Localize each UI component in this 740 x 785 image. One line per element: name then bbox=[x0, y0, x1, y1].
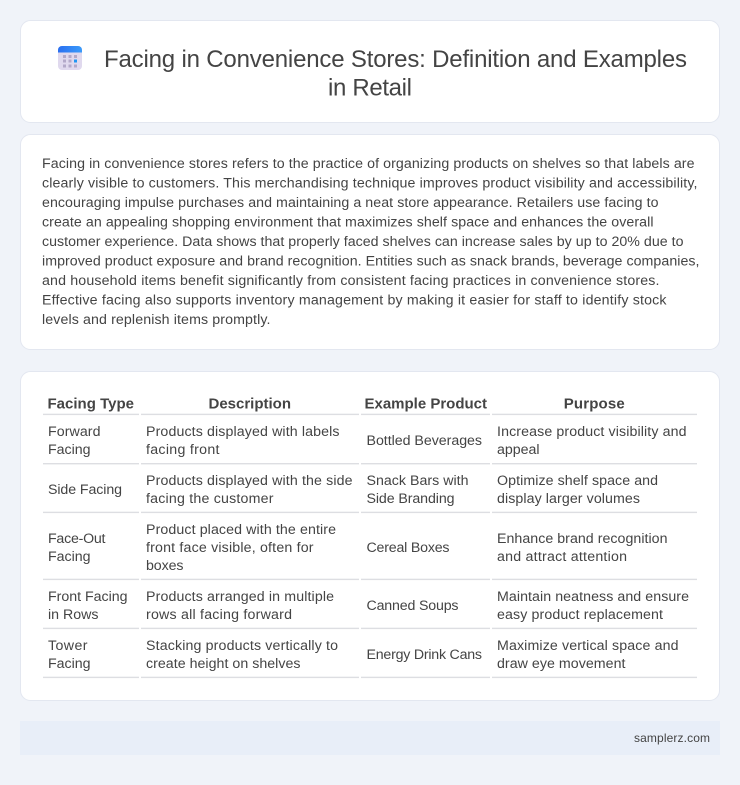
table header: Description bbox=[208, 396, 291, 412]
header card bbox=[20, 20, 720, 122]
row: face-out facing: Product placed with the entire bbox=[146, 522, 336, 538]
row: tower facing: Energy Drink Cans bbox=[366, 647, 482, 663]
row: side facing: display larger volumes bbox=[497, 491, 640, 507]
intro paragraph: levels and replenish items promptly. bbox=[42, 312, 270, 328]
row: face-out facing bbox=[48, 522, 668, 574]
row: forward facing: appeal bbox=[497, 442, 540, 458]
row: tower facing: Tower bbox=[48, 638, 88, 654]
intro paragraph: and household items benefit significantly from consistent facing practices in convenience stores. bbox=[42, 273, 660, 289]
table header: Purpose bbox=[564, 396, 625, 412]
title: Facing in Convenience Stores: Definition and Examples bbox=[104, 46, 687, 73]
intro paragraph bbox=[42, 156, 700, 328]
row: front facing in rows: Front Facing bbox=[48, 589, 128, 605]
table bbox=[43, 396, 697, 678]
table header bbox=[48, 396, 625, 412]
row: tower facing bbox=[48, 638, 678, 672]
row: tower facing: Maximize vertical space and bbox=[497, 638, 678, 654]
footer bar bbox=[20, 721, 720, 755]
row: tower facing: Facing bbox=[48, 656, 90, 672]
row: tower facing: draw eye movement bbox=[497, 656, 626, 672]
row: forward facing: Products displayed with labels bbox=[146, 424, 340, 440]
intro text panel bbox=[20, 134, 720, 350]
intro paragraph: clearly visible to customers. This merchandising technique improves product visibility and accessibility, bbox=[42, 176, 698, 192]
row: face-out facing: Facing bbox=[48, 549, 90, 565]
row: tower facing: Stacking products vertically to bbox=[146, 638, 338, 654]
footer source text: samplerz.com bbox=[634, 731, 710, 745]
row: side facing bbox=[48, 473, 658, 507]
table header: Example Product bbox=[364, 396, 487, 412]
row: front facing in rows: in Rows bbox=[48, 607, 98, 623]
row: face-out facing: front face visible, often for bbox=[146, 540, 314, 556]
row: face-out facing: Enhance brand recognition bbox=[497, 531, 668, 547]
title bbox=[104, 46, 687, 102]
row: side facing: Optimize shelf space and bbox=[497, 473, 658, 489]
row: forward facing: Bottled Beverages bbox=[366, 433, 482, 449]
row: forward facing: Increase product visibility and bbox=[497, 424, 686, 440]
row: tower facing: create height on shelves bbox=[146, 656, 300, 672]
intro paragraph: Facing in convenience stores refers to the practice of organizing products on shelves so that labels are bbox=[42, 156, 695, 172]
row: front facing in rows: Maintain neatness and ensure bbox=[497, 589, 689, 605]
intro paragraph: create an appealing shopping environment that maximizes shelf space and enhances the overall bbox=[42, 214, 654, 230]
row: forward facing bbox=[48, 424, 686, 458]
title: in Retail bbox=[328, 74, 412, 102]
row: front facing in rows: rows all facing forward bbox=[146, 607, 292, 623]
intro paragraph: customer experience. Data shows that properly faced shelves can increase sales by up to 20% due to bbox=[42, 234, 684, 250]
table panel bbox=[20, 372, 720, 700]
icon: calendar grid bbox=[58, 46, 82, 70]
intro paragraph: Effective facing also supports inventory management by making it easier for staff to identify stock bbox=[42, 292, 667, 308]
row: side facing: Side Branding bbox=[366, 491, 454, 507]
row: face-out facing: boxes bbox=[146, 558, 184, 574]
row: front facing in rows: easy product replacement bbox=[497, 607, 663, 623]
row: side facing: Side Facing bbox=[48, 482, 122, 498]
row: face-out facing: Cereal Boxes bbox=[366, 540, 450, 556]
row: face-out facing: and attract attention bbox=[497, 549, 627, 565]
row: side facing: facing the customer bbox=[146, 491, 274, 507]
row: forward facing: Facing bbox=[48, 442, 90, 458]
row: front facing in rows bbox=[48, 589, 689, 623]
intro paragraph: encouraging impulse purchases and maintaining a neat store appearance. Retailers use facing to bbox=[42, 195, 659, 211]
row: forward facing: facing front bbox=[146, 442, 220, 458]
row: forward facing: Forward bbox=[48, 424, 100, 440]
intro paragraph: improved product exposure and brand recognition. Entities such as snack brands, beverage companies, bbox=[42, 254, 700, 270]
row: face-out facing: Face-Out bbox=[48, 531, 106, 547]
row: side facing: Snack Bars with bbox=[366, 473, 468, 489]
table header: Facing Type bbox=[48, 396, 134, 412]
row: front facing in rows: Canned Soups bbox=[366, 598, 458, 614]
row: front facing in rows: Products arranged in multiple bbox=[146, 589, 334, 605]
row: side facing: Products displayed with the side bbox=[146, 473, 353, 489]
